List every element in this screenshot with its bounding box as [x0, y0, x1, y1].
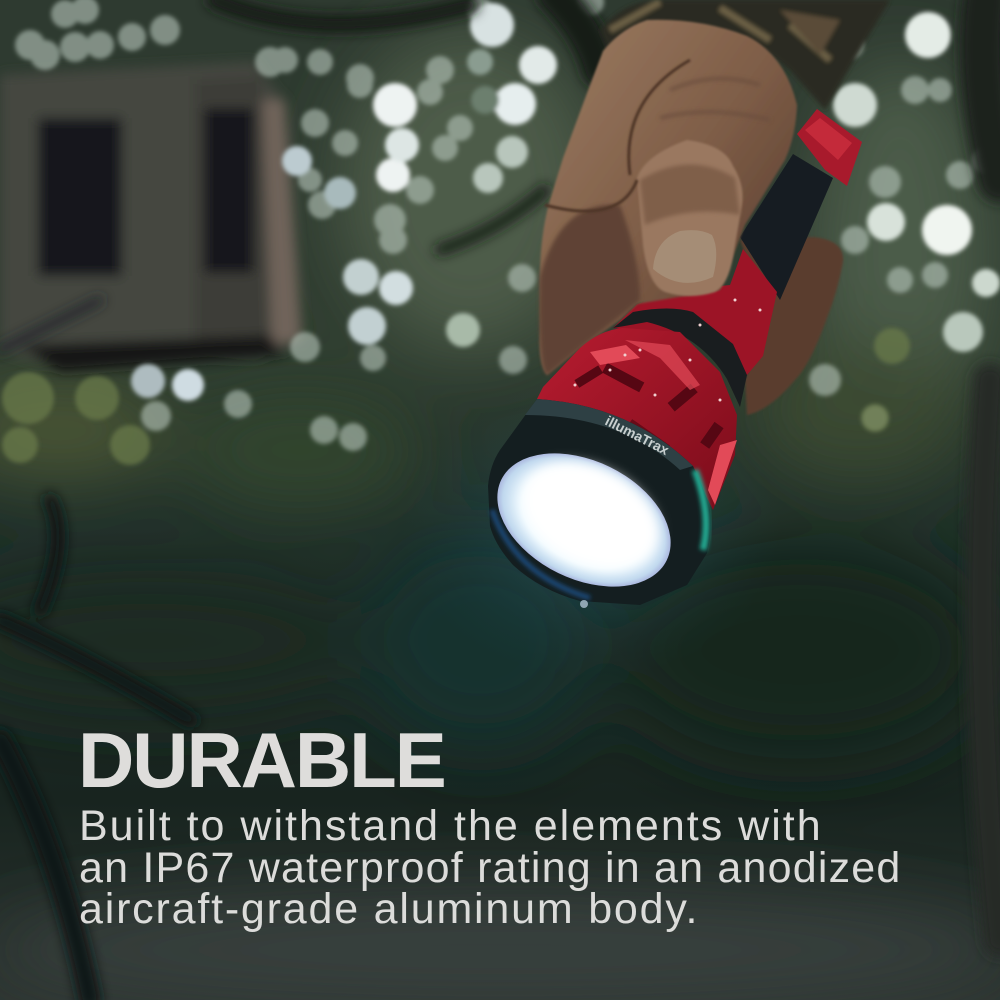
red bezel body: [537, 328, 737, 510]
hunting blind: [0, 62, 302, 372]
body text: an IP67 waterproof rating in an anodized: [79, 844, 902, 892]
sleeve: [600, 0, 890, 110]
light glow: [400, 380, 780, 680]
body text: Built to withstand the elements with: [79, 802, 823, 850]
flashlight tail: [797, 109, 862, 186]
hand: [540, 20, 797, 375]
thumbnail: [653, 230, 716, 283]
flashlight neck: [613, 249, 777, 375]
flashlight and hand: [475, 20, 862, 613]
title: DURABLE: [78, 716, 445, 804]
bezel rubber ring: [488, 399, 711, 605]
body text: [79, 802, 902, 933]
bokeh highlights: [2, 0, 1000, 465]
hand: fingers behind the handle: [740, 237, 843, 415]
black ring: [613, 308, 747, 407]
lens: [475, 427, 693, 613]
thumb: [637, 140, 743, 296]
flashlight handle: [740, 154, 833, 300]
brand text on bezel: illumaTrax: [603, 412, 672, 458]
body text: aircraft-grade aluminum body.: [79, 885, 699, 933]
